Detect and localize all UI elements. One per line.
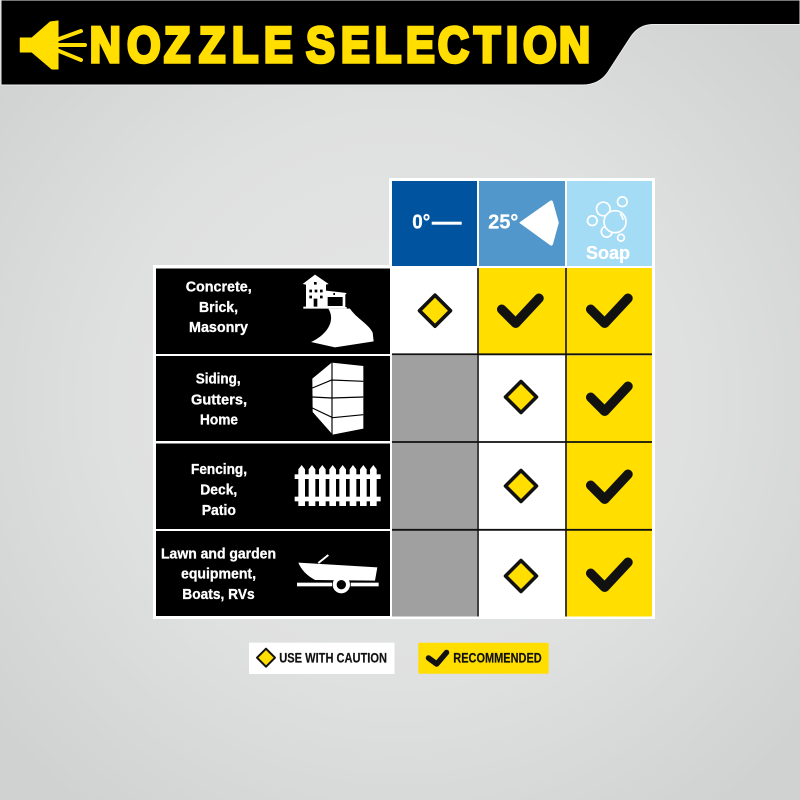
row: fencing, deck, patio: Deck,	[200, 482, 237, 498]
table backing	[153, 178, 655, 619]
banner shape	[1, 0, 800, 85]
row: siding, gutters, home: Home	[200, 412, 238, 428]
row: concrete, brick, masonry	[186, 275, 374, 347]
icon: picket fence	[295, 465, 381, 506]
icon: house with driveway	[303, 275, 374, 347]
check marker: concrete with soap	[591, 298, 628, 323]
check marker: lawn with soap	[591, 562, 628, 587]
row: concrete, brick, masonry: Masonry	[189, 320, 248, 336]
column header: 0 degree nozzle: 0°	[412, 211, 430, 233]
title: NOZZLE SELECTION	[90, 17, 590, 73]
column header: soap	[567, 181, 652, 266]
row: siding, gutters, home: Siding,	[196, 372, 241, 388]
check marker: fencing with soap	[591, 474, 628, 499]
row: concrete, brick, masonry: Concrete,	[186, 279, 252, 295]
caution marker: lawn at 25 degrees	[506, 560, 536, 592]
row: lawn and garden equipment, boats, RVs	[161, 546, 379, 603]
row: siding, gutters, home: Gutters,	[191, 392, 247, 408]
legend: use with caution	[249, 643, 394, 674]
legend: use with caution: USE WITH CAUTION	[279, 651, 387, 666]
column header: 25 degree nozzle: 25°	[488, 211, 518, 233]
check marker: siding with soap	[591, 386, 628, 411]
row: lawn and garden equipment, boats, RVs: Lawn and garden	[161, 546, 276, 562]
table row labels column	[156, 268, 390, 354]
caution marker: concrete at 0 degrees	[420, 295, 450, 326]
icon: boat on trailer	[297, 555, 379, 591]
header banner	[1, 0, 800, 85]
row: lawn and garden equipment, boats, RVs: equipment,	[181, 566, 256, 582]
column header: 0 degree nozzle	[392, 181, 477, 266]
column header: 25 degree nozzle	[479, 181, 565, 266]
icon: nozzle spray	[20, 21, 85, 69]
icon: siding wall	[312, 363, 363, 435]
column header: soap: Soap	[586, 243, 630, 263]
legend: recommended	[418, 643, 549, 674]
row: siding, gutters, home	[191, 363, 363, 435]
row: concrete, brick, masonry: Brick,	[199, 300, 238, 316]
legend: recommended: RECOMMENDED	[453, 651, 542, 666]
check marker: concrete at 25 degrees	[502, 298, 539, 323]
row: fencing, deck, patio: Fencing,	[191, 462, 247, 478]
caution marker: fencing at 25 degrees	[506, 470, 536, 502]
row: fencing, deck, patio: Patio	[202, 503, 236, 519]
caution marker: siding at 25 degrees	[506, 382, 536, 412]
grid cells	[392, 268, 652, 616]
row: lawn and garden equipment, boats, RVs: Boats, RVs	[182, 587, 255, 603]
row: fencing, deck, patio	[191, 462, 381, 519]
